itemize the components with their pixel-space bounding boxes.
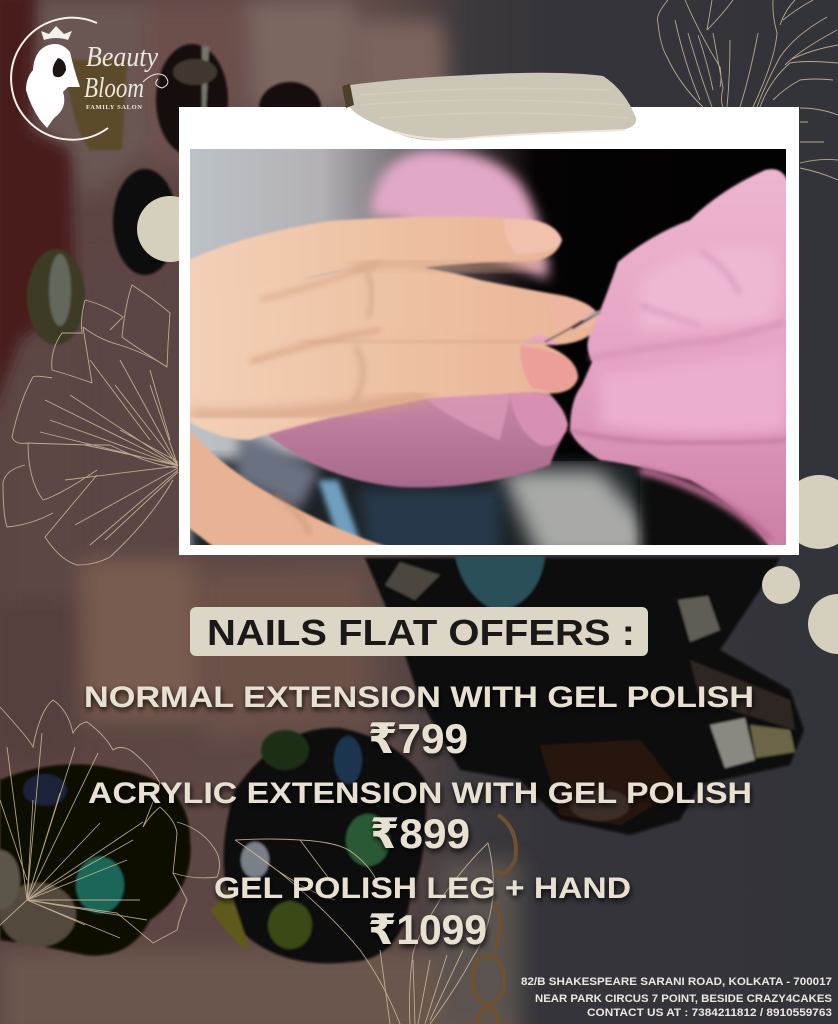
- under glove: [262, 388, 567, 487]
- top finger: [190, 216, 562, 300]
- finger creases and shading: [260, 269, 360, 302]
- logo crescent ring: [11, 18, 108, 140]
- left flower: [3, 285, 178, 565]
- middle finger: [190, 265, 596, 360]
- decorative cream circles: [137, 196, 838, 654]
- address and contact footer: [521, 976, 832, 1019]
- address line 2: NEAR PARK CIRCUS 7 POINT, BESIDE CRAZY4CAKES: [535, 993, 832, 1005]
- background: blurred hand with decorated nails: [0, 0, 532, 1024]
- bottom centre flower: [235, 839, 493, 1024]
- logo: Beauty Bloom Family Salon: [11, 18, 168, 140]
- offer 1 price: ₹799: [368, 715, 468, 762]
- lower thumb: [190, 429, 388, 545]
- gemstone nails and chain at the bottom: [0, 556, 804, 963]
- offer 3 name: GEL POLISH LEG + HAND: [214, 872, 631, 905]
- offer 2 price: ₹899: [370, 810, 470, 857]
- brush: [544, 326, 574, 344]
- offer 3 price: ₹1099: [368, 906, 487, 953]
- logo name text: [84, 41, 158, 104]
- right glove: [570, 169, 790, 548]
- offer 1 name: NORMAL EXTENSION WITH GEL POLISH: [84, 681, 754, 714]
- address line 1: 82/B SHAKESPEARE SARANI ROAD, KOLKATA - 700017: [521, 976, 832, 988]
- contact line: CONTACT US AT : 7384211812 / 8910559763: [587, 1007, 832, 1019]
- nail care photo: [185, 149, 790, 560]
- logo woman silhouette: [26, 44, 80, 128]
- offers list: [84, 681, 754, 953]
- framed photo: [179, 107, 799, 560]
- logo name text: Bloom: [84, 72, 144, 104]
- top-right flower: [657, 0, 838, 180]
- offer 2 name: ACRYLIC EXTENSION WITH GEL POLISH: [88, 777, 752, 810]
- logo tagline: FAMILY SALON: [86, 104, 142, 111]
- third finger: [190, 339, 578, 442]
- logo name text: Beauty: [86, 41, 158, 73]
- heading pill: [190, 607, 648, 656]
- gold chain links: [472, 815, 516, 1024]
- bottom-left flower: [0, 700, 220, 943]
- heading text: NAILS FLAT OFFERS :: [207, 612, 635, 653]
- logo crown: [41, 26, 72, 40]
- white photo frame: [179, 107, 799, 555]
- paint brush stroke: [342, 73, 636, 141]
- logo swash: [143, 74, 168, 88]
